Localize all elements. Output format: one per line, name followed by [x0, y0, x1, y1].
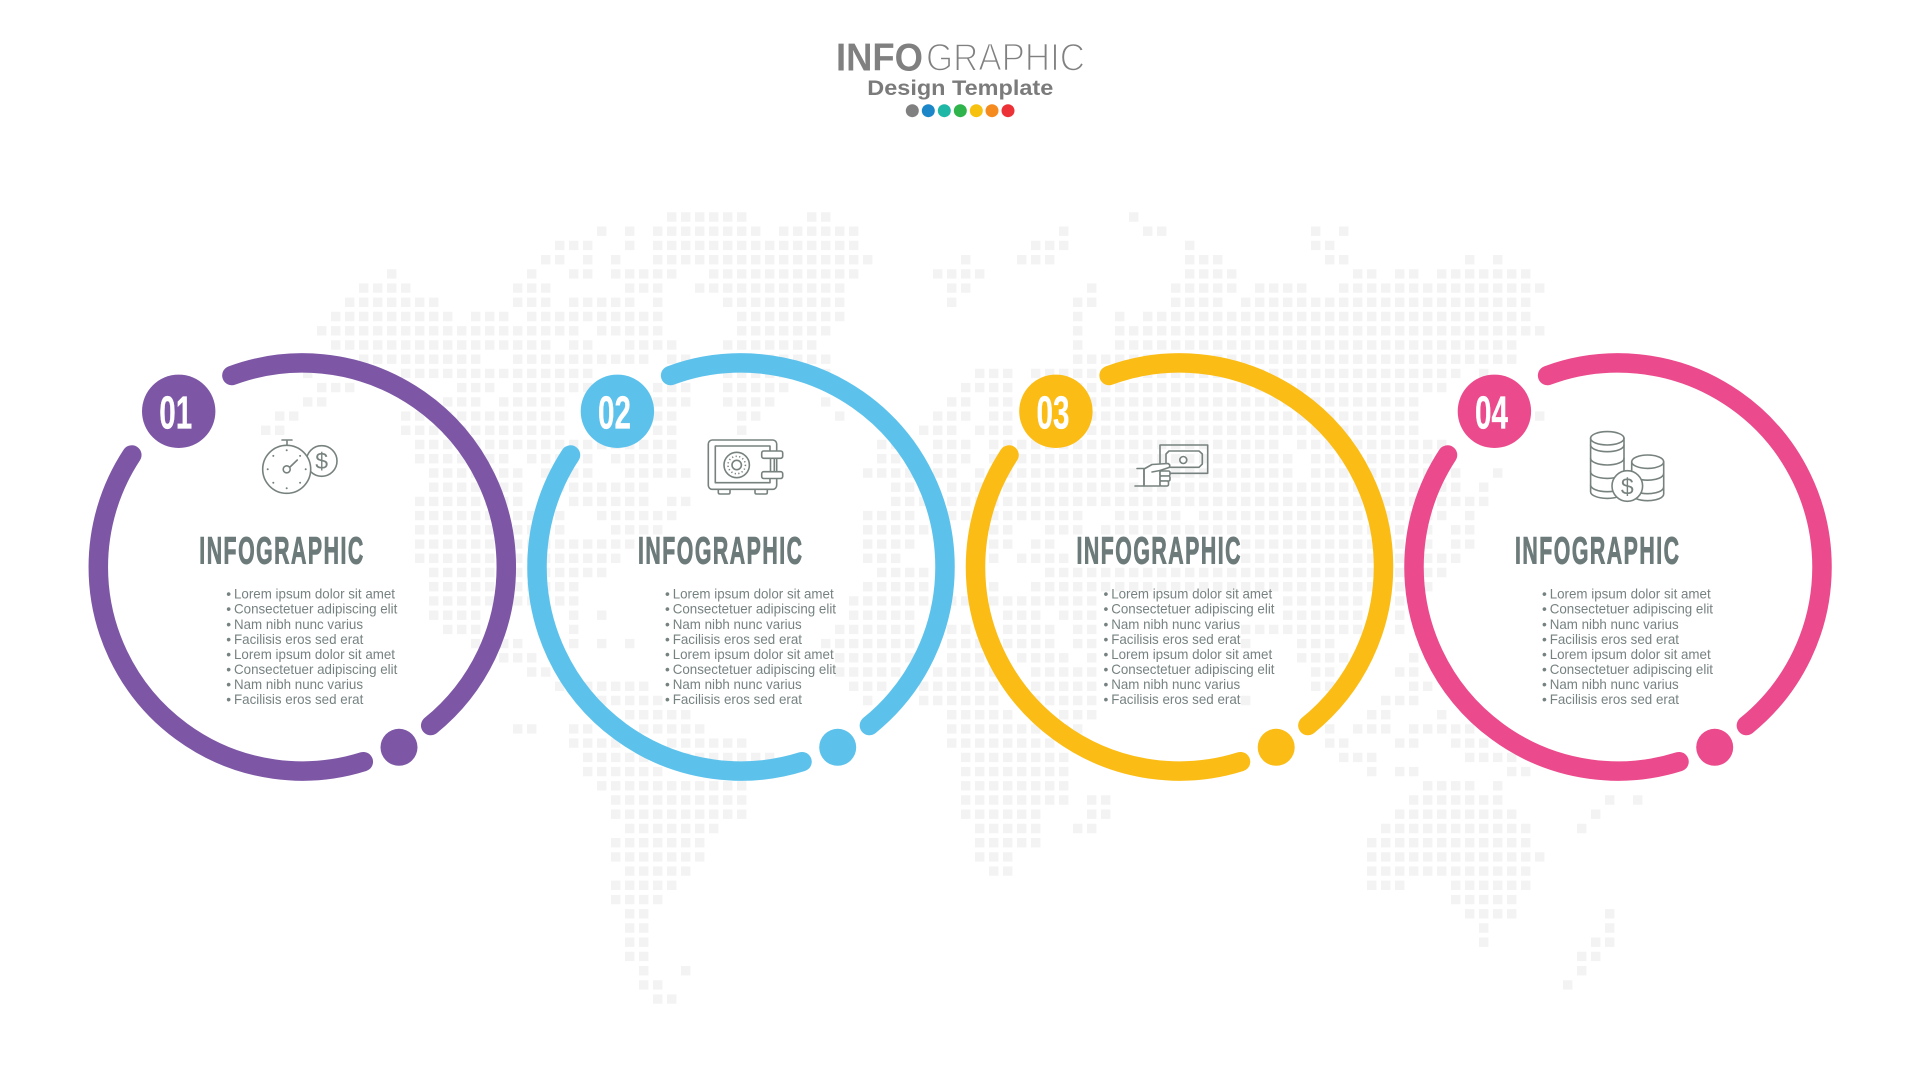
bullet list: •	[1104, 647, 1108, 662]
header: infographic design template	[836, 37, 1085, 117]
bullet list: •	[665, 662, 670, 677]
bullet list: •	[1542, 602, 1547, 617]
bullet list: Facilisis eros sed erat	[673, 632, 802, 647]
panel heading: INFOGRAPHIC	[199, 529, 365, 572]
bullet list: •	[1542, 692, 1547, 707]
panel heading: INFOGRAPHIC	[638, 529, 803, 572]
bullet list: Nam nibh nunc varius	[1111, 677, 1240, 692]
icon: hand holding banknote	[1135, 445, 1208, 486]
ring arcs	[1414, 363, 1822, 771]
ring arcs	[98, 363, 506, 771]
bullet list: •	[1542, 617, 1547, 632]
bullet list: •	[1542, 632, 1547, 647]
background: dotted world map	[261, 217, 1642, 999]
bullet list: Nam nibh nunc varius	[1111, 617, 1240, 632]
heading: INFOGRAPHIC: GRAPHIC	[926, 37, 1085, 80]
bullet list: Nam nibh nunc varius	[1550, 617, 1679, 632]
icon: stopwatch and dollar coin	[263, 440, 337, 493]
bullet list: •	[1104, 602, 1108, 617]
bullet list: •	[226, 602, 231, 617]
panel: step 01 purple	[98, 363, 506, 771]
bullet list: Nam nibh nunc varius	[1550, 677, 1679, 692]
bullet list: •	[226, 692, 231, 707]
bullet list: •	[1104, 632, 1108, 647]
number badge 02: 02	[598, 386, 631, 438]
panel heading: INFOGRAPHIC	[1076, 529, 1242, 572]
bullet list: Consectetuer adipiscing elit	[234, 602, 397, 617]
small ring dot	[380, 729, 418, 766]
bullet list: •	[1542, 662, 1547, 677]
ring arcs	[537, 363, 945, 771]
bullet list: •	[226, 662, 231, 677]
bullet list: •	[665, 647, 670, 662]
number badge 01	[142, 375, 215, 448]
bullet list: •	[665, 602, 670, 617]
bullet list: •	[1104, 692, 1108, 707]
icon: stopwatch and dollar coin: $	[315, 448, 328, 474]
bullet list: Facilisis eros sed erat	[234, 632, 363, 647]
number badge 04: 04	[1475, 386, 1508, 438]
bullet list: Facilisis eros sed erat	[1550, 632, 1679, 647]
bullet list: Lorem ipsum dolor sit amet	[673, 647, 834, 662]
bullet list: Facilisis eros sed erat	[673, 692, 802, 707]
colour dots row	[906, 104, 1014, 117]
bullet list: •	[226, 587, 231, 602]
small ring dot	[819, 729, 856, 766]
bullet list: Consectetuer adipiscing elit	[1111, 662, 1275, 677]
bullet list: Facilisis eros sed erat	[1550, 692, 1679, 707]
bullet list: •	[1104, 677, 1108, 692]
subheading: design template: Design Template	[867, 76, 1053, 100]
bullet list: Nam nibh nunc varius	[234, 677, 363, 692]
bullet list: •	[1104, 587, 1108, 602]
bullet list: Nam nibh nunc varius	[673, 617, 802, 632]
bullet list: •	[226, 617, 231, 632]
bullet list: •	[1104, 617, 1108, 632]
number badge 03: 03	[1036, 386, 1070, 438]
number badge 03	[1019, 375, 1093, 448]
number badge 04	[1458, 375, 1531, 448]
bullet list: Consectetuer adipiscing elit	[234, 662, 397, 677]
number badge 02	[581, 375, 654, 448]
bullet list: Lorem ipsum dolor sit amet	[1111, 647, 1272, 662]
bullet list: Lorem ipsum dolor sit amet	[1550, 587, 1711, 602]
bullet list: •	[665, 677, 670, 692]
bullet list: •	[1104, 662, 1108, 677]
bullet list: Facilisis eros sed erat	[234, 692, 363, 707]
bullet list: •	[665, 587, 670, 602]
panel: step 03 yellow	[976, 363, 1384, 771]
bullet list: Consectetuer adipiscing elit	[1111, 602, 1275, 617]
small ring dot	[1258, 729, 1295, 766]
bullet list: Consectetuer adipiscing elit	[673, 662, 836, 677]
icon: coin stacks with dollar: $	[1621, 473, 1634, 499]
bullet list: Lorem ipsum dolor sit amet	[1111, 587, 1272, 602]
bullet list: •	[226, 677, 231, 692]
bullet list: Lorem ipsum dolor sit amet	[1550, 647, 1711, 662]
bullet list: Consectetuer adipiscing elit	[1550, 602, 1713, 617]
bullet list: Lorem ipsum dolor sit amet	[234, 587, 395, 602]
bullet list: •	[1542, 677, 1547, 692]
bullet list: •	[226, 632, 231, 647]
bullet list: Facilisis eros sed erat	[1111, 632, 1241, 647]
bullet list: Lorem ipsum dolor sit amet	[673, 587, 834, 602]
heading: INFOGRAPHIC: INFO	[836, 37, 923, 80]
bullet list: •	[665, 632, 670, 647]
bullet list: •	[665, 617, 670, 632]
number badge 01: 01	[159, 386, 192, 438]
bullet list: Nam nibh nunc varius	[234, 617, 363, 632]
bullet list: Consectetuer adipiscing elit	[1550, 662, 1713, 677]
bullet list: Lorem ipsum dolor sit amet	[234, 647, 395, 662]
bullet list: •	[226, 647, 231, 662]
ring arcs	[976, 363, 1384, 771]
panel: step 04 pink	[1414, 363, 1822, 771]
bullet list: Nam nibh nunc varius	[673, 677, 802, 692]
icon: coin stacks with dollar	[1591, 432, 1664, 501]
icon: safe	[708, 440, 783, 494]
bullet list: •	[1542, 587, 1547, 602]
bullet list: •	[665, 692, 670, 707]
panel: step 02 blue	[537, 363, 945, 771]
bullet list: Facilisis eros sed erat	[1111, 692, 1241, 707]
small ring dot	[1696, 729, 1733, 766]
bullet list: •	[1542, 647, 1547, 662]
bullet list: Consectetuer adipiscing elit	[673, 602, 836, 617]
panel heading: INFOGRAPHIC	[1515, 529, 1680, 572]
